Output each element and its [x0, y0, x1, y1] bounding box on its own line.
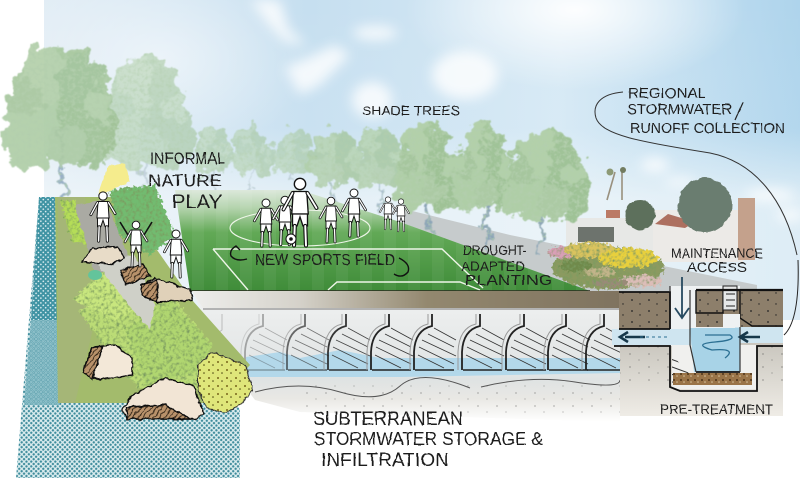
- label: new sports field: [231, 246, 409, 276]
- label: subterranean stormwater storage and infiltration: SUBTERRANEAN: [313, 409, 463, 430]
- label: regional stormwater runoff collection: [627, 85, 785, 137]
- label: regional stormwater runoff collection: REGIONAL: [628, 85, 706, 102]
- label: regional stormwater runoff collection: STORMWATER: [627, 101, 732, 118]
- storage arches: [212, 314, 628, 370]
- underground section: [192, 291, 620, 422]
- road and houses: [400, 167, 757, 292]
- label: drought-adapted planting: ADAPTED: [461, 258, 525, 274]
- label: subterranean stormwater storage and infiltration: INFILTRATION: [321, 450, 449, 470]
- label: pre-treatment: PRE-TREATMENT: [660, 402, 773, 417]
- label: subterranean stormwater storage and infiltration: STORMWATER STORAGE &: [314, 429, 543, 449]
- children playing soccer: [254, 178, 409, 246]
- icon: background shade trees: [2, 44, 405, 210]
- clouds: [250, 0, 800, 221]
- label: subterranean stormwater storage and infiltration: [313, 409, 543, 470]
- label: shade trees: SHADE TREES: [362, 103, 460, 118]
- icon: foreground shade trees: [394, 125, 592, 250]
- label: maintenance access: [671, 246, 763, 275]
- label: maintenance access: ACCESS: [687, 260, 747, 275]
- halftone teal backdrop: [16, 197, 240, 478]
- rocks: [82, 247, 203, 419]
- sports field: [175, 190, 590, 291]
- label: new sports field: NEW SPORTS FIELD: [255, 252, 395, 269]
- collection curve: [595, 92, 797, 255]
- nature play planting bed: [55, 164, 250, 403]
- children playing on the rocks: [91, 192, 188, 277]
- water in storage chambers: [246, 350, 620, 377]
- sky background: [10, 0, 800, 320]
- yellow flowering shrub: [198, 352, 253, 413]
- label: drought-adapted planting: PLANTING: [465, 272, 552, 289]
- drought-adapted planting mound: [548, 242, 664, 289]
- label: informal nature play: PLAY: [172, 192, 222, 212]
- label: maintenance access: MAINTENANCE: [671, 246, 763, 261]
- label: informal nature play: [148, 149, 225, 212]
- label: drought-adapted planting: DROUGHT-: [463, 242, 527, 258]
- label: informal nature play: INFORMAL: [150, 149, 225, 168]
- label: regional stormwater runoff collection: RUNOFF COLLECTION: [630, 120, 785, 137]
- label: informal nature play: NATURE: [148, 171, 222, 190]
- label: drought-adapted planting: [461, 242, 552, 289]
- ground line below storage: [255, 377, 620, 397]
- pre-treatment vault: [612, 260, 798, 416]
